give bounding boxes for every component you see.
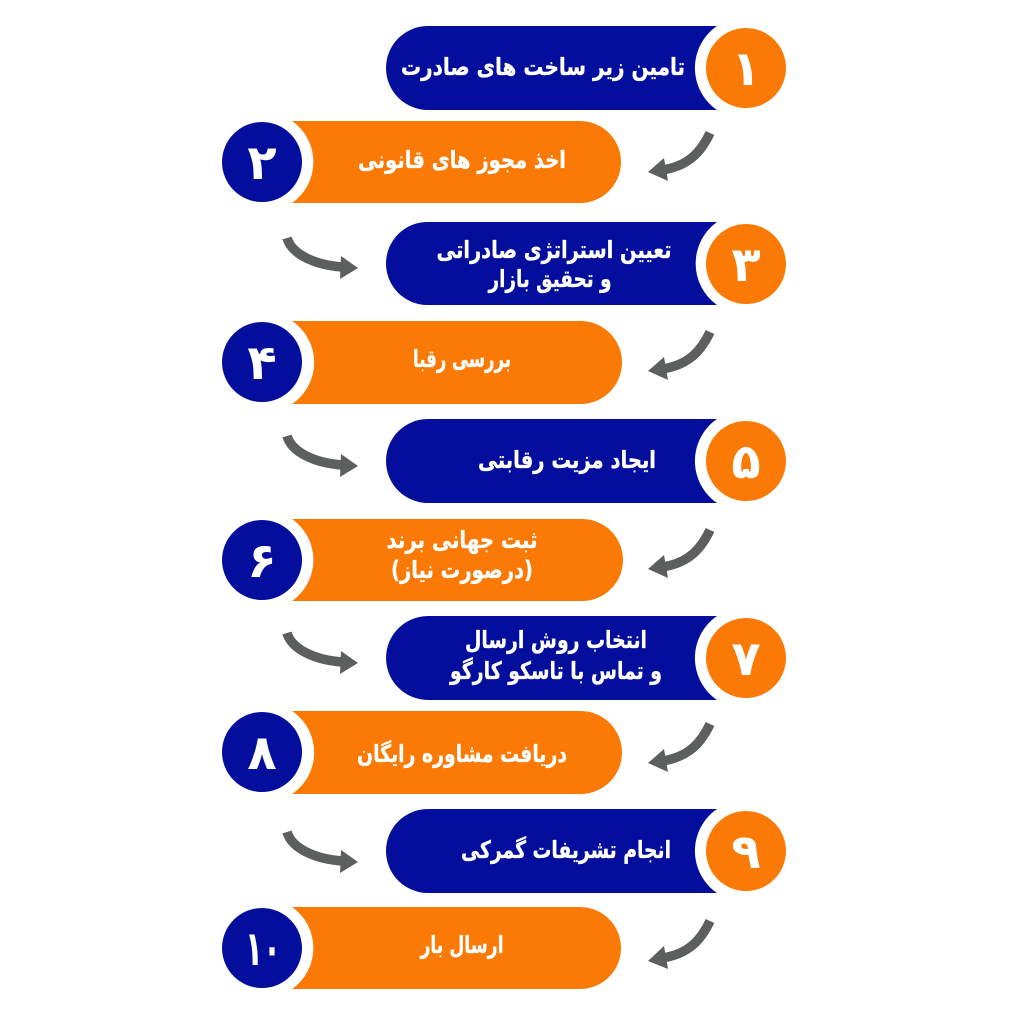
arrow 4 to 5: [287, 436, 358, 477]
step 8: ۸: [247, 725, 277, 781]
step 3: تعیین استراتژی صادراتی: [436, 236, 672, 264]
step 5: [386, 419, 786, 503]
step 7: و تماس با تاسکو کارگو: [449, 657, 662, 685]
step 1: ۱: [731, 41, 761, 97]
step 2: اخذ مجوز های قانونی: [358, 146, 566, 174]
step 4: بررسی رقبا: [413, 345, 511, 373]
arrow 5 to 6: [648, 530, 710, 578]
step 8: [222, 711, 622, 794]
step 8: دریافت مشاوره رایگان: [357, 740, 567, 768]
arrow 1 to 2: [648, 133, 710, 181]
step 2: [222, 121, 621, 203]
step 6: ثبت جهانی برند: [386, 526, 538, 554]
arrow 9 to 10: [648, 921, 710, 969]
step 4: ۴: [247, 335, 277, 391]
step 6: (درصورت نیاز): [391, 556, 533, 584]
arrow 3 to 4: [648, 332, 710, 380]
step 5: ایجاد مزیت رقابتی: [478, 446, 656, 474]
step 5: ۵: [731, 434, 761, 490]
step 10: ارسال بار: [420, 931, 504, 959]
step 7: انتخاب روش ارسال: [465, 626, 647, 654]
step 3: [386, 222, 786, 305]
step 3: ۳: [731, 237, 761, 293]
step 3: و تحقیق بازار: [488, 265, 612, 293]
step 1: تامین زیر ساخت های صادرت: [401, 53, 685, 81]
step 4: [222, 321, 622, 404]
arrow 8 to 9: [287, 832, 358, 873]
arrow 6 to 7: [287, 633, 358, 674]
step 7: ۷: [731, 631, 761, 687]
step 9: ۹: [731, 824, 761, 880]
step 6: [222, 519, 623, 601]
step 9: انجام تشریفات گمرکی: [461, 836, 671, 864]
step 10: [222, 907, 621, 989]
arrow 7 to 8: [648, 724, 710, 772]
step 10: ۱۰: [245, 921, 281, 977]
arrow 2 to 3: [287, 238, 358, 279]
step 9: [386, 809, 786, 893]
step 2: ۲: [247, 135, 277, 191]
step 7: [386, 616, 786, 700]
step 1: [386, 26, 786, 110]
step 6: ۶: [247, 533, 277, 589]
